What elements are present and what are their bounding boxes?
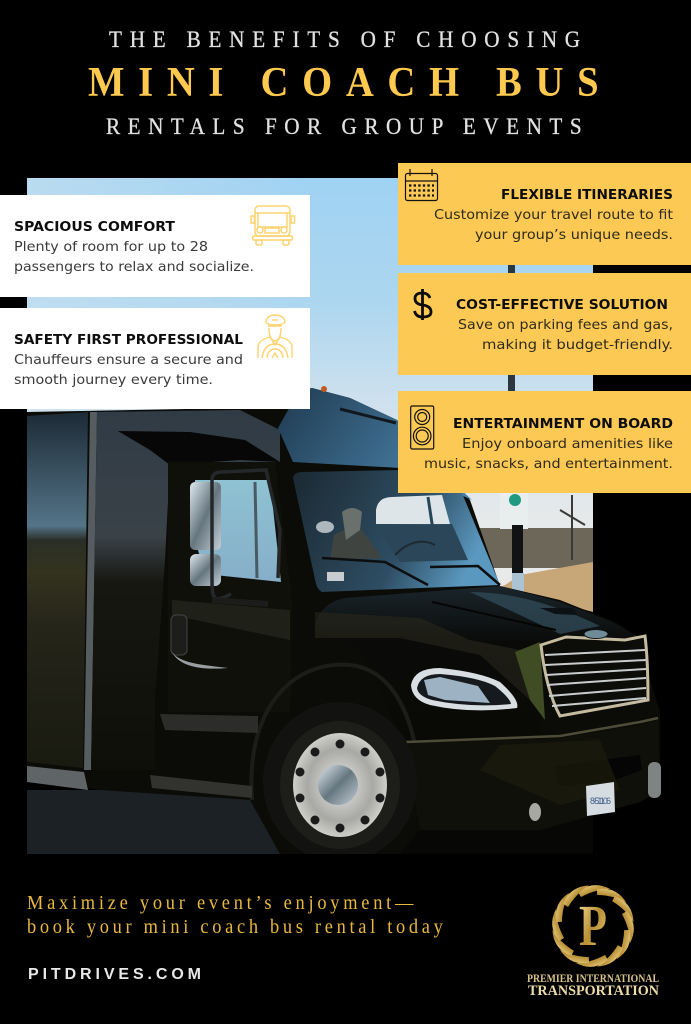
panel: spacious comfort: SPACIOUS COMFORT (14, 219, 176, 235)
logo: premier international transportation: TRANSPORTATION (528, 983, 659, 999)
call to action (27, 892, 443, 938)
front wheel (263, 702, 417, 862)
grille (541, 630, 648, 716)
panel: flexible itineraries: your group’s unique needs. (475, 228, 673, 243)
panel: entertainment on board: music, snacks, and entertainment. (424, 457, 673, 472)
logo: premier international transportation: P (579, 893, 607, 958)
door pillar (84, 412, 97, 770)
website: PITDRIVES.COM (28, 966, 201, 983)
panel: cost-effective solution: Save on parking fees and gas, (458, 318, 673, 333)
icon: calendar (406, 169, 438, 200)
logo: premier international transportation: PREMIER INTERNATIONAL (527, 973, 659, 985)
panel: spacious comfort: Plenty of room for up to 28 (14, 240, 208, 255)
title: MINI COACH BUS (88, 59, 599, 105)
bus (27, 386, 661, 862)
panel: safety first professional: SAFETY FIRST PROFESSIONAL (14, 332, 243, 348)
title (88, 26, 599, 139)
panel: flexible itineraries (398, 163, 691, 265)
icon: dollar sign (414, 289, 431, 320)
hood (320, 586, 627, 632)
steps (27, 766, 88, 790)
panel: flexible itineraries: FLEXIBLE ITINERARIES (501, 187, 673, 203)
roof marker and visor (321, 386, 396, 423)
bumper (405, 718, 661, 830)
photo: mini coach bus in front of a parking lot (27, 178, 661, 862)
panel: safety first professional (0, 308, 310, 409)
bus body silhouette (27, 388, 660, 854)
cab shadow (118, 431, 280, 465)
door window (195, 480, 281, 582)
panel: cost-effective solution: COST-EFFECTIVE SOLUTION (456, 297, 668, 313)
call to action: book your mini coach bus rental today (27, 916, 443, 938)
wheel arch (251, 665, 420, 800)
call to action: Maximize your event’s enjoyment— (27, 892, 414, 914)
door lower reflection (172, 600, 290, 640)
licence plate (586, 782, 615, 816)
panel: cost-effective solution (398, 273, 691, 375)
roof (278, 388, 472, 500)
side panel (91, 410, 280, 770)
icon: speaker (411, 406, 434, 449)
panel: cost-effective solution: making it budget-friendly. (482, 338, 673, 353)
windshield opening and driver (316, 495, 468, 581)
panel: entertainment on board: ENTERTAINMENT ON BOARD (453, 416, 673, 432)
panel: flexible itineraries: Customize your travel route to fit (434, 208, 673, 223)
panel: entertainment on board (398, 391, 691, 493)
side reflection (315, 612, 530, 700)
icon: chauffeur (258, 315, 292, 358)
panel: spacious comfort (0, 195, 310, 297)
door (168, 462, 208, 500)
bus: 8-51106 (590, 796, 611, 806)
icon: bus (251, 206, 294, 245)
panel: spacious comfort: passengers to relax and socialize. (14, 260, 254, 275)
panel: safety first professional: smooth journey every time. (14, 373, 213, 388)
panel: safety first professional: Chauffeurs ensure a secure and (14, 353, 243, 368)
mirrors (190, 470, 280, 604)
panel: entertainment on board: Enjoy onboard amenities like (462, 437, 673, 452)
title: THE BENEFITS OF CHOOSING (109, 26, 580, 52)
door handle (171, 615, 187, 655)
photo backdrop: sky, trees and ground (27, 178, 593, 854)
hood vent (540, 608, 578, 615)
wipers (322, 558, 500, 585)
title: RENTALS FOR GROUP EVENTS (106, 113, 582, 139)
logo wreath (549, 882, 637, 970)
logo: premier international transportation (527, 882, 659, 999)
windshield (293, 470, 500, 592)
headlight (411, 668, 517, 710)
rear side window with reflection (27, 412, 88, 768)
